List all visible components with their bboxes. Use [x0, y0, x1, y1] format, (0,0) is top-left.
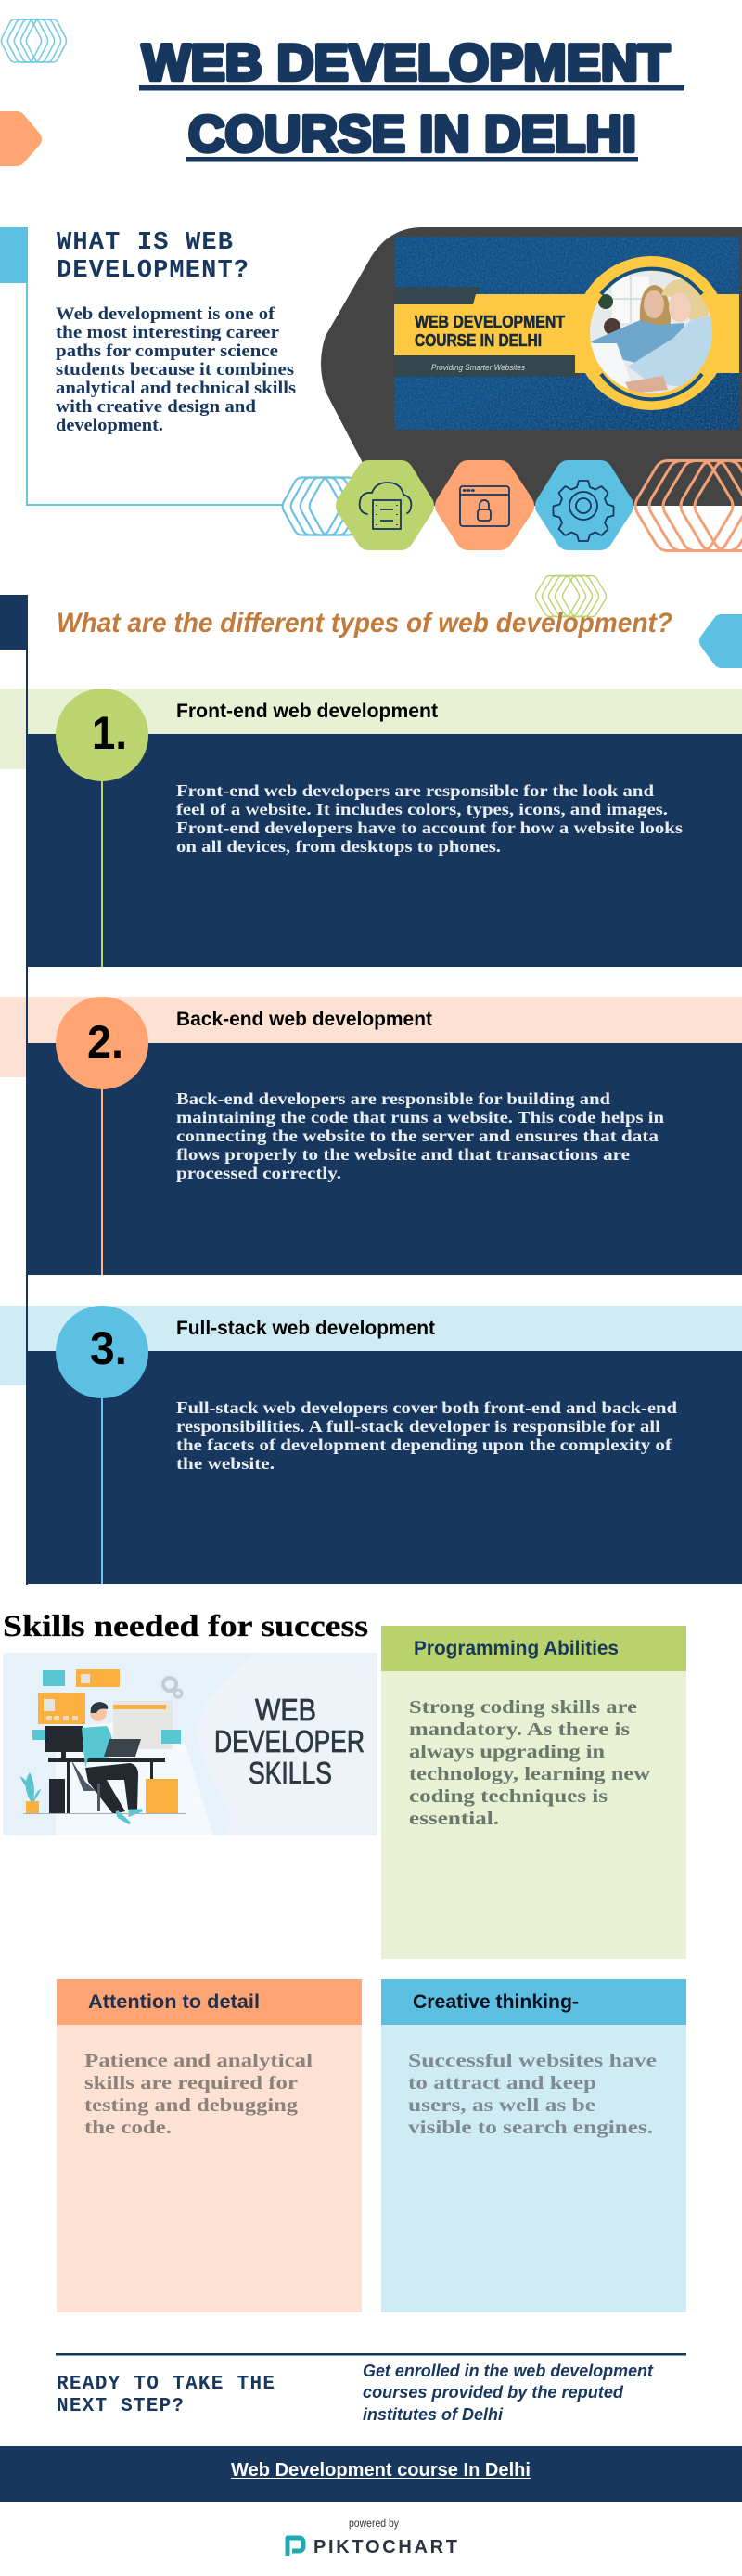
piktochart logo: PIKTOCHART [313, 2537, 457, 2557]
image: web developer skills illustration [3, 1653, 377, 1835]
number badge 3: 3. [90, 1322, 127, 1374]
banner text: WEB DEVELOPMENT [415, 313, 565, 331]
number badge 1 [56, 689, 148, 781]
number badge 3 [56, 1306, 148, 1398]
decorative: navy block and timeline rule [0, 595, 28, 1585]
card text: Successful websites have [408, 2051, 657, 2071]
card text: coding techniques is [409, 1786, 608, 1807]
card text: Patience and analytical [84, 2051, 313, 2071]
title [139, 33, 684, 162]
card heading: Creative thinking- [413, 1991, 579, 2013]
card text [409, 1697, 651, 1829]
piktochart logo [288, 2517, 457, 2557]
text block: intro paragraph: development. [56, 417, 163, 435]
step 3 text: the facets of development depending upon the complexity of [176, 1436, 672, 1454]
panel: creative thinking [381, 1979, 686, 2312]
step 3 text: responsibilities. A full-stack developer is responsible for all [176, 1417, 660, 1436]
decorative: peach outline hexagons [635, 460, 742, 551]
text block: intro paragraph: students because it combines [56, 361, 294, 380]
card text: technology, learning new [409, 1764, 651, 1784]
step 3 text [176, 1398, 677, 1473]
call to action text: courses provided by the reputed [363, 2383, 624, 2402]
panel: call to action [56, 2353, 686, 2424]
title: COURSE IN DELHI [188, 105, 636, 162]
card text: visible to search engines. [408, 2118, 653, 2138]
image caption text: WEB [255, 1693, 316, 1727]
card heading: Attention to detail [88, 1991, 260, 2013]
decorative: peach hexagon left edge [0, 121, 32, 157]
image caption text: SKILLS [249, 1756, 332, 1790]
text block: intro paragraph: Web development is one of [56, 305, 275, 324]
step 2 text: maintaining the code that runs a website. This code helps in [176, 1108, 664, 1127]
icon: logo mark [288, 2538, 303, 2556]
card text: skills are required for [84, 2073, 298, 2093]
card text [408, 2051, 657, 2138]
heading: what is web development: DEVELOPMENT? [57, 257, 249, 285]
decorative: blue outline hexagons top left [1, 19, 67, 62]
text block: intro paragraph [56, 305, 296, 435]
panel: what is web development [0, 227, 296, 505]
number badge 2 [56, 997, 148, 1089]
illustration: developer at desk [20, 1669, 186, 1823]
call to action text: institutes of Delhi [363, 2405, 504, 2424]
image: course banner [394, 237, 739, 430]
heading: skills needed for success: Skills needed for success [3, 1610, 368, 1643]
photo ring arcs [601, 269, 702, 399]
step 3 heading: Full-stack web development [176, 1318, 435, 1339]
call to action heading: NEXT STEP? [57, 2396, 184, 2417]
step 1 text [176, 781, 683, 856]
card text: the code. [84, 2118, 172, 2138]
panel: step 2 back-end [0, 997, 742, 1275]
number badge 2: 2. [87, 1016, 123, 1068]
image caption text [215, 1698, 364, 1784]
step 1 text: on all devices, from desktops to phones. [176, 837, 501, 856]
photo: two women at a laptop [590, 271, 712, 393]
decorative: blue outline hexagons [283, 477, 367, 535]
step 2 text: Back-end developers are responsible for building and [176, 1089, 610, 1108]
step 1 text: feel of a website. It includes colors, types, icons, and images. [176, 800, 668, 818]
card text: always upgrading in [409, 1742, 605, 1762]
card text: testing and debugging [84, 2095, 298, 2116]
text block: intro paragraph: paths for computer science [56, 342, 278, 361]
card text: essential. [409, 1809, 499, 1829]
icon: gear on blue hexagon [548, 473, 620, 541]
call to action text: Get enrolled in the web development [363, 2362, 654, 2380]
footer band: Web Development course In Delhi [231, 2460, 531, 2480]
card text [84, 2051, 313, 2138]
step 2 text: processed correctly. [176, 1164, 341, 1182]
icon: cloud server on green hexagon [349, 473, 421, 537]
step 1 text: Front-end developers have to account for how a website looks [176, 818, 683, 837]
banner text [415, 313, 565, 350]
panel: programming abilities [381, 1626, 686, 1959]
image caption text: DEVELOPER [214, 1724, 365, 1758]
card text: to attract and keep [408, 2073, 596, 2093]
card text: mandatory. As there is [409, 1719, 630, 1740]
text block: intro paragraph: the most interesting career [56, 324, 279, 342]
panel: attention to detail [57, 1979, 362, 2312]
decorative: blue hexagon right edge [709, 624, 742, 659]
text block: intro paragraph: with creative design and [56, 398, 257, 417]
title: WEB DEVELOPMENT [142, 33, 670, 91]
icon: browser lock on peach hexagon [448, 473, 521, 537]
call to action heading: READY TO TAKE THE [57, 2374, 275, 2395]
step 2 text: flows properly to the website and that transactions are [176, 1145, 630, 1164]
card heading: Programming Abilities [414, 1638, 619, 1659]
panel: step 1 front-end [0, 689, 742, 967]
heading: what is web development [57, 229, 249, 285]
panel: step 3 full-stack [0, 1306, 742, 1584]
banner text: COURSE IN DELHI [415, 331, 542, 350]
text block: intro paragraph: analytical and technical skills [56, 380, 296, 398]
panel: dark hexagon backdrop [321, 227, 742, 506]
footer band [0, 2446, 742, 2502]
decorative: green outline hexagons [535, 575, 607, 616]
step 2 heading: Back-end web development [176, 1009, 432, 1030]
step 2 text: connecting the website to the server and ensures that data [176, 1127, 659, 1145]
call to action text [363, 2362, 654, 2424]
call to action heading [57, 2374, 275, 2417]
step 2 text [176, 1089, 664, 1182]
step 1 heading: Front-end web development [176, 701, 438, 722]
step 1 text: Front-end web developers are responsible for the look and [176, 781, 654, 800]
card text: Strong coding skills are [409, 1697, 637, 1718]
piktochart logo: powered by [349, 2517, 399, 2530]
heading: types of web development: What are the different types of web development? [57, 608, 672, 638]
card text: users, as well as be [408, 2095, 595, 2116]
step 3 text: the website. [176, 1454, 275, 1473]
heading: what is web development: WHAT IS WEB [57, 229, 233, 257]
image: course banner: Providing Smarter Websites [431, 363, 525, 373]
number badge 1: 1. [92, 707, 127, 759]
step 3 text: Full-stack web developers cover both front-end and back-end [176, 1398, 677, 1417]
